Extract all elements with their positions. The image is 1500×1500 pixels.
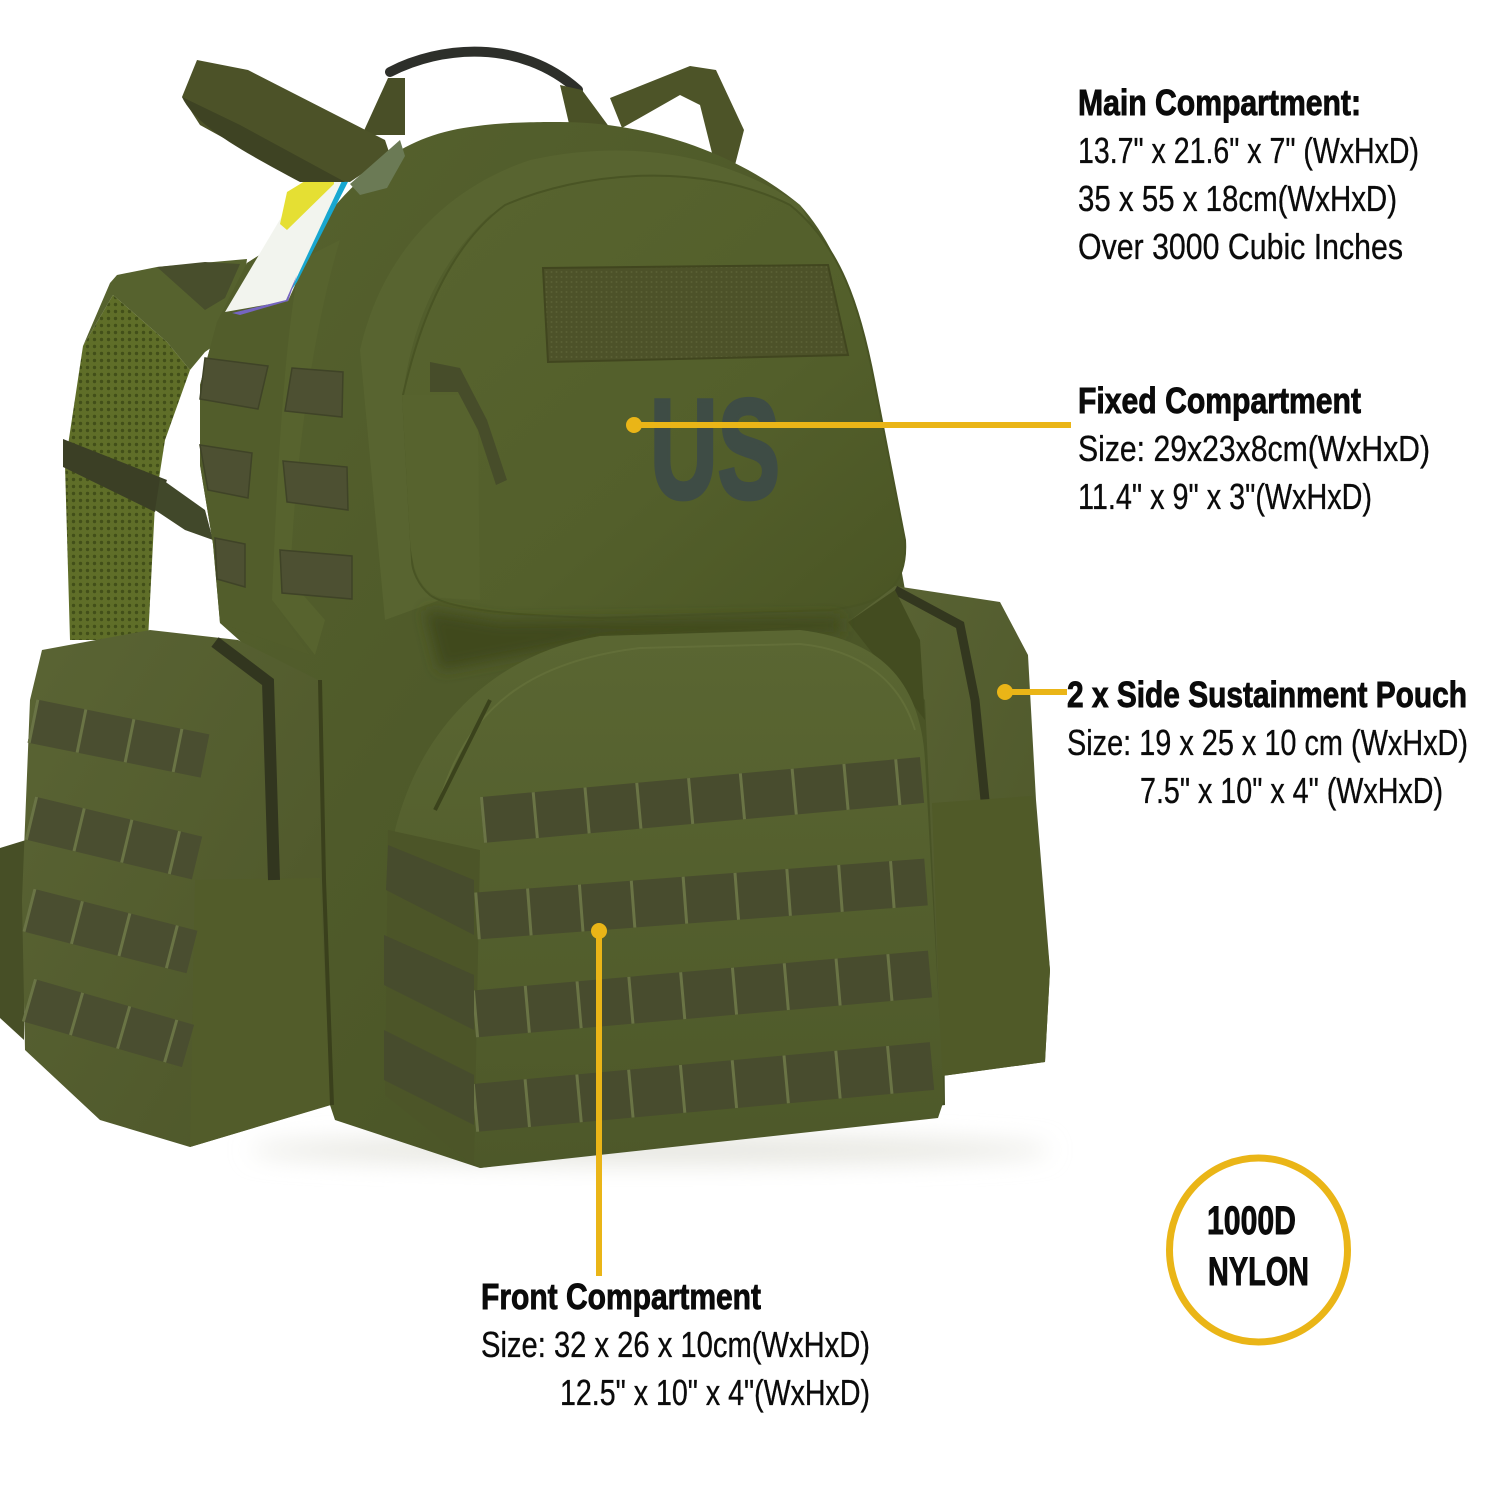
- zipper pull: [430, 362, 507, 485]
- front pocket: [384, 630, 944, 1168]
- text: main compartment: 35 x 55 x 18cm(WxHxD): [1078, 178, 1397, 219]
- carry handle: [362, 52, 610, 135]
- spine seam: [272, 240, 340, 655]
- floor shadow: [250, 1136, 1050, 1164]
- text: front compartment: [481, 1276, 870, 1413]
- text: main compartment: Main Compartment:: [1078, 82, 1361, 123]
- badge: 1000D nylon: [1170, 1158, 1348, 1342]
- top webbing strap right: [610, 66, 744, 165]
- text: front compartment: 12.5" x 10" x 4"(WxHxD): [560, 1372, 870, 1413]
- text: side sustainment pouch: [1067, 674, 1468, 811]
- velcro patch: [543, 265, 848, 362]
- text: front compartment: Front Compartment: [481, 1276, 761, 1317]
- text: fixed compartment: [1078, 380, 1430, 517]
- callout line: side pouch: [997, 684, 1067, 700]
- left pouch webbing: [28, 721, 205, 1046]
- main body: [200, 122, 945, 1168]
- badge: 1000D nylon: NYLON: [1208, 1250, 1309, 1294]
- right side pouch: [848, 586, 1050, 1076]
- front pocket side webbing: [384, 845, 474, 1125]
- top webbing strap left: [182, 60, 405, 195]
- text: front compartment: Size: 32 x 26 x 10cm(WxHxD): [481, 1324, 870, 1365]
- text: fixed compartment: Size: 29x23x8cm(WxHxD): [1078, 428, 1430, 469]
- text: main compartment: 13.7" x 21.6" x 7" (WxHxD): [1078, 130, 1419, 171]
- callout line: front compartment: [591, 923, 607, 1276]
- hang tag: [225, 164, 351, 315]
- US print: US: [650, 370, 780, 529]
- shoulder strap with mesh padding: [63, 259, 247, 640]
- shadow under top pocket: [425, 610, 840, 670]
- text: main compartment: [1078, 82, 1419, 267]
- callout line: fixed compartment: [626, 417, 1071, 433]
- side webbing loops: [200, 358, 352, 599]
- text: main compartment: Over 3000 Cubic Inches: [1078, 226, 1403, 267]
- text: fixed compartment: 11.4" x 9" x 3"(WxHxD): [1078, 476, 1372, 517]
- text: fixed compartment: Fixed Compartment: [1078, 380, 1361, 421]
- side slip pocket: [402, 395, 480, 600]
- badge: 1000D nylon: 1000D: [1207, 1199, 1296, 1243]
- molle webbing rows: [474, 780, 932, 1108]
- backpack illustration: [0, 52, 1050, 1168]
- body side shading: [200, 208, 333, 655]
- top gusset: [360, 150, 825, 620]
- left side pouch: [0, 630, 332, 1147]
- top pocket: [402, 176, 905, 618]
